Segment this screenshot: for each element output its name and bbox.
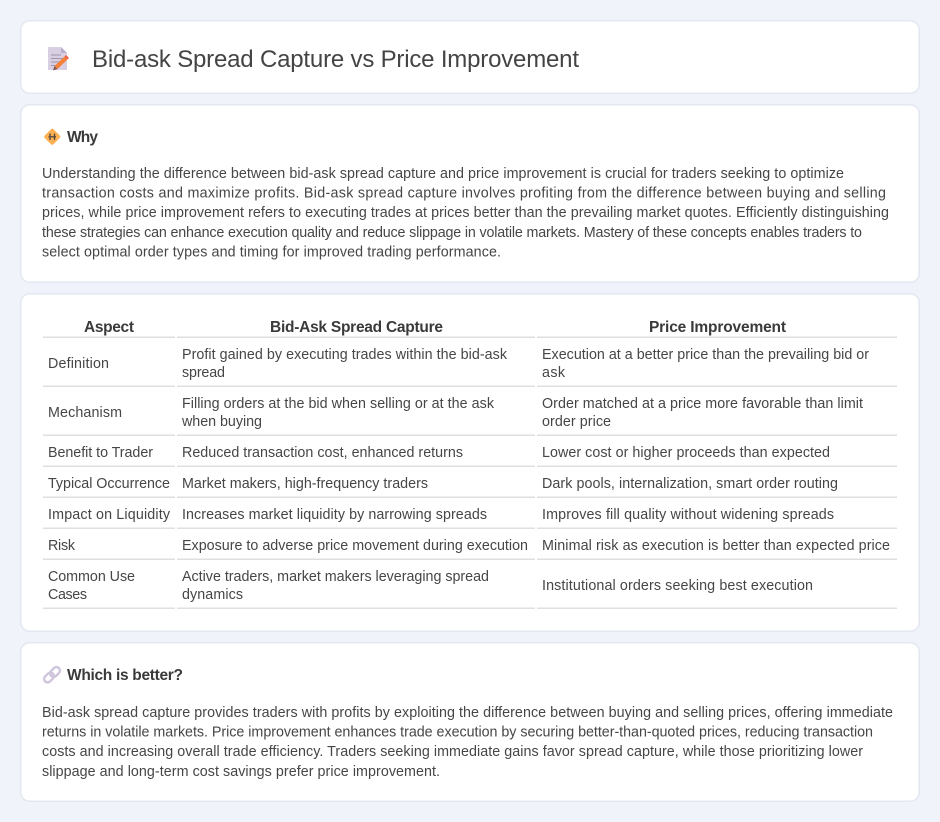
text block: why: select optimal order types and timing for improved trading performance. [42,244,501,260]
row: benefit to trader: Benefit to Trader [48,445,153,461]
row: mechanism: Order matched at a price more favorable than limit [542,396,863,412]
text block: why: prices, while price improvement refers to executing trades at prices better than the prevailing market quotes. Efficiently distinguishing [42,205,889,221]
table header [43,319,897,338]
text block: which is better: costs and increasing overall trade efficiency. Traders seeking immediate gains favor spread capture, while those prioritizing lower [42,744,863,760]
row: risk [43,538,897,560]
row: definition [43,347,897,387]
row: common use cases [43,569,897,609]
text block: which is better: slippage and long-term cost savings prefer price improvement. [42,764,440,780]
row: impact on liquidity [43,507,897,529]
panel: header [21,21,919,93]
row: definition: spread [182,365,225,381]
row: mechanism: when buying [181,414,262,430]
heading: why: Why [67,129,98,146]
row: benefit to trader: Lower cost or higher proceeds than expected [542,445,830,461]
row: common use cases: dynamics [182,587,243,603]
panel: why [21,105,919,282]
row: definition: Execution at a better price than the prevailing bid or [542,347,869,363]
row: definition: Profit gained by executing trades within the bid-ask [182,347,508,363]
row: risk: Exposure to adverse price movement during execution [182,538,528,554]
row: benefit to trader: Reduced transaction cost, enhanced returns [182,445,463,461]
row: mechanism [43,396,897,436]
text block: why: these strategies can enhance execution quality and reduce slippage in volatile markets. Mastery of these concepts enables traders to [42,225,862,241]
icon: link [43,666,61,684]
row: mechanism: order price [542,414,611,430]
panel: which is better [21,643,919,801]
row: definition: Definition [48,356,109,372]
table header: Aspect [84,319,134,336]
row: impact on liquidity: Improves fill quality without widening spreads [542,507,834,523]
text block: which is better: Bid-ask spread capture provides traders with profits by exploiting the difference between buying and selling prices, offering immediate [42,705,893,721]
row: mechanism: Mechanism [48,405,122,421]
text block: why: Understanding the difference between bid-ask spread capture and price improvement is crucial for traders seeking to optimize [42,166,844,182]
text block: why: transaction costs and maximize profits. Bid-ask spread capture involves profiting from the difference between buying and selling [42,186,886,202]
row: typical occurrence: Market makers, high-frequency traders [182,476,428,492]
row: common use cases: Cases [48,587,87,603]
heading: which is better: Which is better? [67,667,183,684]
icon: document with pencil [48,47,69,70]
row: common use cases: Common Use [48,569,135,585]
row: impact on liquidity: Increases market liquidity by narrowing spreads [182,507,487,523]
row: common use cases: Active traders, market makers leveraging spread [182,569,489,585]
text block: why [42,166,889,260]
row: risk: Risk [48,538,76,554]
row: common use cases: Institutional orders seeking best execution [542,578,813,594]
table header: Price Improvement [649,319,786,336]
table header: Bid-Ask Spread Capture [270,319,443,336]
row: typical occurrence [43,476,897,498]
row: risk: Minimal risk as execution is better than expected price [542,538,890,554]
panel: comparison table [21,294,919,631]
row: definition: ask [542,365,566,381]
title: Bid-ask Spread Capture vs Price Improvement [92,46,579,73]
row: impact on liquidity: Impact on Liquidity [48,507,171,523]
icon: orange diamond [43,128,61,146]
row: benefit to trader [43,445,897,467]
row: mechanism: Filling orders at the bid when selling or at the ask [182,396,495,412]
text block: which is better [42,705,893,780]
text block: which is better: returns in volatile markets. Price improvement enhances trade execution by securing better-than-quoted prices, reducing transaction [42,725,873,741]
row: typical occurrence: Dark pools, internalization, smart order routing [542,476,838,492]
row: typical occurrence: Typical Occurrence [48,476,170,492]
